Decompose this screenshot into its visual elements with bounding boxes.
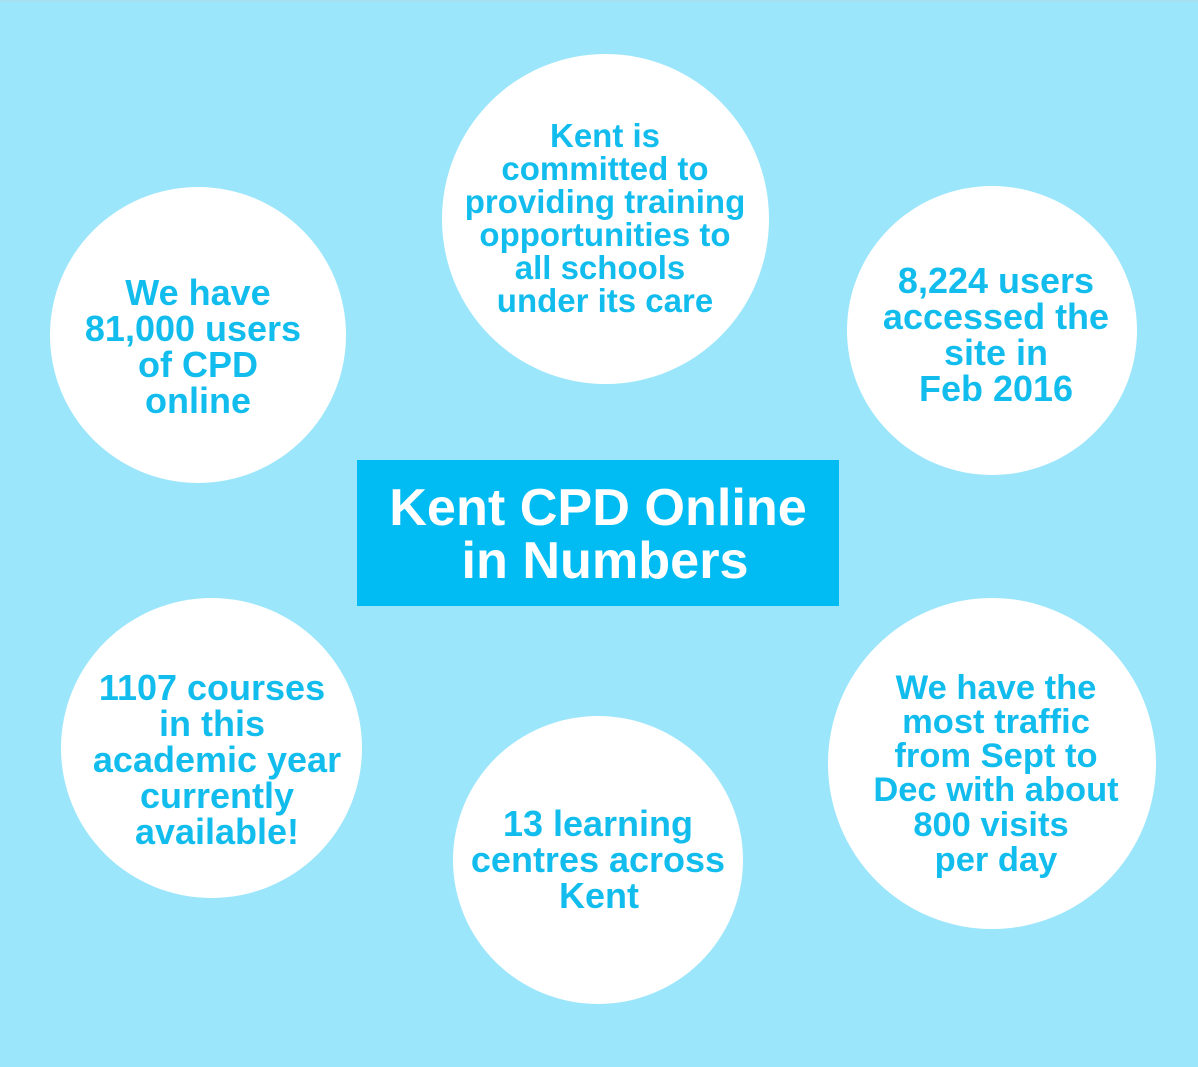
panel: 8,224 users circle: site in bbox=[944, 332, 1048, 373]
panel: 81,000 users circle bbox=[50, 187, 346, 483]
panel: 1107 courses circle: available! bbox=[135, 811, 299, 852]
panel: Kent commitment circle: opportunities to bbox=[479, 216, 731, 253]
title bbox=[357, 460, 839, 606]
panel: Kent commitment circle: Kent is bbox=[550, 117, 660, 154]
panel: 81,000 users circle: We have bbox=[125, 272, 271, 313]
panel: Kent commitment circle: under its care bbox=[497, 282, 713, 319]
panel: 13 learning centres circle: 13 learning bbox=[503, 803, 693, 844]
panel: traffic circle: 800 visits bbox=[913, 806, 1069, 844]
panel: 1107 courses circle: in this bbox=[159, 703, 265, 744]
title: Kent CPD Online bbox=[389, 479, 807, 537]
panel: Kent commitment circle: committed to bbox=[501, 150, 709, 187]
panel: traffic circle: Dec with about bbox=[873, 771, 1119, 809]
panel: traffic circle: per day bbox=[935, 841, 1057, 879]
title: in Numbers bbox=[461, 532, 749, 590]
panel: 8,224 users circle: accessed the bbox=[883, 296, 1109, 337]
panel: 8,224 users circle: 8,224 users bbox=[898, 260, 1094, 301]
panel: traffic circle: most traffic bbox=[902, 703, 1090, 741]
panel: 1107 courses circle: 1107 courses bbox=[99, 667, 325, 708]
panel: 81,000 users circle: of CPD bbox=[138, 344, 258, 385]
panel: 13 learning centres circle bbox=[453, 716, 743, 1004]
panel: 1107 courses circle: currently bbox=[140, 775, 294, 816]
panel: 1107 courses circle: academic year bbox=[93, 739, 341, 780]
panel: 8,224 users circle bbox=[847, 186, 1137, 475]
panel: traffic circle: We have the bbox=[896, 669, 1096, 707]
panel: 81,000 users circle: 81,000 users bbox=[85, 308, 301, 349]
panel: Kent commitment circle bbox=[442, 54, 769, 384]
panel: traffic circle: from Sept to bbox=[894, 737, 1098, 775]
panel: 81,000 users circle: online bbox=[145, 380, 251, 421]
panel: 13 learning centres circle: Kent bbox=[559, 875, 639, 916]
panel: 13 learning centres circle: centres across bbox=[471, 839, 725, 880]
panel: 1107 courses circle bbox=[61, 598, 362, 898]
panel: Kent commitment circle: all schools bbox=[515, 249, 685, 286]
panel: Kent commitment circle: providing training bbox=[465, 183, 745, 220]
panel: traffic circle bbox=[828, 598, 1156, 929]
panel: 8,224 users circle: Feb 2016 bbox=[919, 368, 1073, 409]
